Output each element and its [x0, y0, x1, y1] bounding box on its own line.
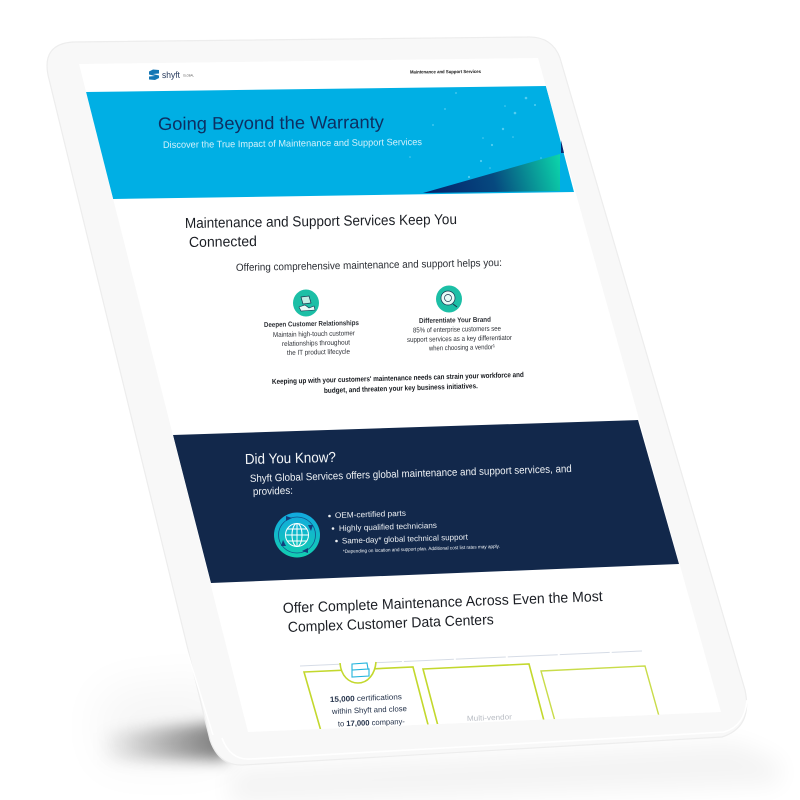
card 1 text: 15,000 certifications	[330, 692, 402, 704]
benefit: deepen customer relationships	[264, 320, 359, 357]
did you know description	[250, 463, 572, 498]
logo	[149, 70, 194, 80]
section heading: complete maintenance: Complex Customer Data Centers	[288, 612, 494, 636]
bullet list: Same-day* global technical support	[342, 533, 469, 545]
card 1 text: to 17,000 company-	[338, 717, 405, 728]
key message: budget, and threaten your key business initiatives.	[324, 381, 478, 395]
section heading: keep you connected: Maintenance and Support Services Keep You	[185, 212, 457, 232]
floor shadow	[100, 680, 780, 800]
benefit: differentiate your brand: Differentiate Your Brand	[419, 317, 491, 325]
benefit: differentiate your brand: when choosing a vendor¹	[428, 344, 496, 353]
card 1 text: within Shyft and close	[331, 704, 407, 716]
card 1 badge	[340, 662, 376, 683]
section heading: keep you connected	[186, 214, 456, 247]
icon: differentiate brand	[436, 286, 462, 312]
key message	[272, 370, 524, 395]
bullet list	[328, 509, 500, 555]
card 3	[540, 665, 660, 720]
card 2: multi-vendor: Multi-vendor	[467, 712, 513, 723]
key message: Keeping up with your customers' maintenance needs can strain your workforce and	[272, 370, 524, 386]
card 1: certifications	[303, 662, 429, 729]
bullet list: *Depending on location and support plan. Additional cost list rates may apply.	[343, 544, 500, 555]
did you know heading: Did You Know?	[245, 450, 336, 468]
tablet screen	[79, 58, 721, 732]
did you know description: provides:	[253, 485, 293, 498]
hero stars	[409, 92, 542, 178]
card 1 text	[330, 692, 407, 728]
bullet list: OEM-certified parts	[335, 509, 406, 520]
icon: global support	[274, 512, 320, 558]
benefit: deepen customer relationships: relationships throughout	[282, 340, 350, 348]
benefit: deepen customer relationships: the IT product lifecycle	[287, 349, 350, 357]
tablet frame	[47, 37, 747, 765]
logo: shyft	[162, 70, 180, 80]
benefit: deepen customer relationships: Deepen Customer Relationships	[264, 320, 359, 329]
hero banner	[85, 86, 574, 199]
card 2: multi-vendor	[422, 663, 544, 724]
logo: GLOBAL	[183, 73, 194, 77]
did you know description: Shyft Global Services offers global maintenance and support services, and	[250, 463, 572, 485]
intro sentence: Offering comprehensive maintenance and support helps you:	[236, 257, 502, 274]
navigation label: Maintenance and Support Services	[410, 69, 481, 74]
hero subtitle: Discover the True Impact of Maintenance and Support Services	[163, 137, 422, 151]
benefit: deepen customer relationships: Maintain high-touch customer	[273, 330, 356, 339]
icon: customer relationships	[293, 290, 319, 316]
hero wedge	[423, 140, 564, 193]
panel: did you know	[173, 420, 679, 583]
benefit: differentiate your brand	[407, 317, 513, 353]
benefit: differentiate your brand: support services as a key differentiator	[407, 335, 513, 344]
benefit: differentiate your brand: 85% of enterprise customers see	[413, 326, 501, 334]
bullet list: Highly qualified technicians	[339, 521, 437, 533]
hero title: Going Beyond the Warranty	[158, 112, 384, 134]
section heading: keep you connected: Connected	[189, 234, 257, 251]
section heading: complete maintenance	[283, 589, 603, 636]
section heading: complete maintenance: Offer Complete Maintenance Across Even the Most	[283, 589, 603, 617]
